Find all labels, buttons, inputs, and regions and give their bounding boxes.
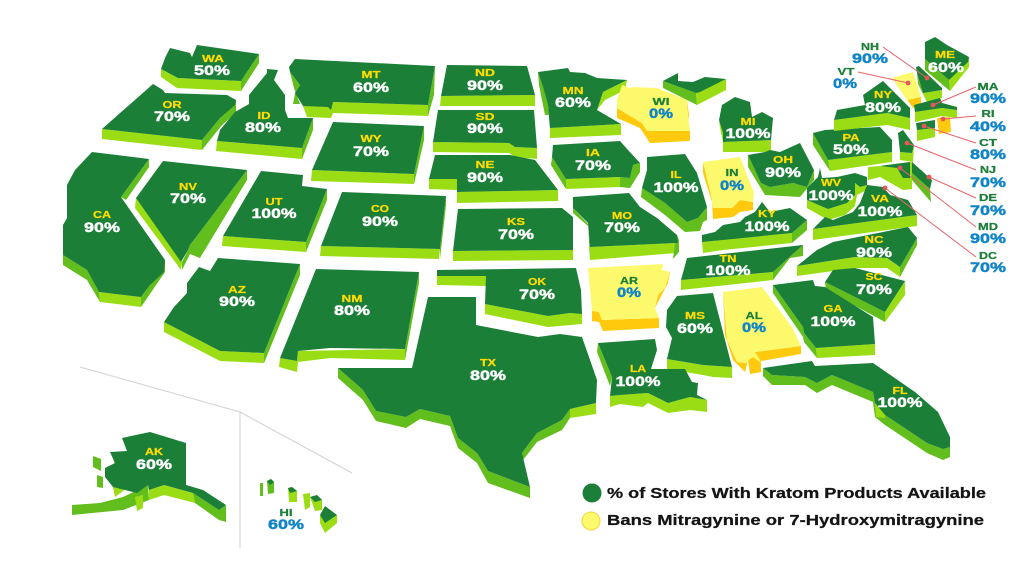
state: Florida (763, 361, 950, 460)
state: Virginia (813, 185, 917, 240)
state: Missouri: 70% (604, 219, 641, 235)
state: Hawaii: HI (280, 507, 293, 519)
state: Texas (338, 297, 597, 498)
state: Indiana: 0% (720, 177, 745, 193)
state: Arkansas: AR (620, 275, 638, 287)
callout: MD: 90% (970, 230, 1007, 246)
state: North Carolina (797, 227, 917, 277)
callout: CT: CT (979, 137, 998, 149)
state: Tennessee: TN (720, 253, 736, 265)
state: Arizona: 90% (219, 293, 256, 309)
state: Colorado: CO (371, 203, 389, 215)
state: Nevada: NV (179, 181, 197, 193)
callout: NH: NH (861, 41, 879, 53)
state: Tennessee: 100% (706, 262, 751, 278)
state: Oregon: OR (162, 99, 182, 111)
state: Michigan: 100% (726, 125, 771, 141)
state: South Carolina (825, 268, 905, 322)
state: Nevada (135, 161, 247, 270)
state: Louisiana: 100% (616, 373, 661, 389)
state: Kansas (453, 208, 573, 261)
callout: NH: 90% (852, 50, 889, 66)
state: South Dakota: SD (476, 111, 495, 123)
callout: DC: 70% (970, 259, 1007, 275)
state: Ohio: 90% (765, 164, 802, 180)
state: Vermont (892, 72, 921, 108)
state: Wyoming (311, 122, 424, 184)
state: Indiana (703, 157, 754, 219)
state: Utah: 100% (252, 205, 297, 221)
state: Nebraska (429, 155, 558, 203)
state: Virginia: VA (871, 193, 890, 205)
callout: RI (941, 108, 1007, 134)
state: Illinois (641, 154, 707, 232)
callout: MA: MA (978, 81, 999, 93)
state: West Virginia: 100% (808, 187, 854, 203)
state: New Mexico (279, 269, 419, 372)
state: Oklahoma (437, 268, 582, 327)
map of contiguous states (63, 37, 969, 498)
state: Utah (222, 171, 327, 252)
callout: NJ (905, 141, 1007, 190)
state: Colorado (320, 192, 446, 259)
state: Montana: MT (362, 69, 381, 81)
state: Minnesota: 60% (555, 94, 592, 110)
callout: DE: DE (979, 192, 997, 204)
state: Iowa: IA (586, 147, 601, 159)
state: Missouri: MO (612, 210, 632, 222)
state: Wisconsin: WI (652, 96, 670, 108)
state: South Dakota: 90% (467, 120, 504, 136)
state: Oregon: 70% (154, 108, 191, 124)
state: South Carolina: SC (866, 271, 883, 283)
callout: DE (927, 175, 1007, 218)
state: Idaho: 80% (245, 119, 282, 135)
state: Rhode Island (937, 117, 951, 134)
callout: DE: 70% (970, 202, 1007, 218)
state: Kentucky (702, 202, 807, 253)
state: Texas: TX (480, 357, 496, 369)
state: Ohio: OH (773, 154, 793, 166)
callout: DC (883, 186, 1007, 275)
state: Minnesota (538, 68, 627, 138)
callout: RI: RI (982, 108, 995, 120)
callout: CT (922, 124, 1007, 162)
state: Iowa (551, 141, 640, 189)
state: Mississippi: MS (685, 310, 705, 322)
state: Ohio (748, 143, 814, 197)
state: Montana: 60% (353, 79, 390, 95)
state: New York: 80% (865, 99, 902, 115)
state: Kentucky: KY (758, 208, 776, 220)
state: Nebraska: NE (476, 159, 494, 171)
state: New Jersey (898, 130, 914, 162)
state: Alaska: AK (145, 446, 163, 458)
state: Hawaii (260, 479, 337, 533)
state: Arizona: AZ (228, 284, 247, 296)
legend entry: stores with kratom (582, 484, 986, 502)
state: Georgia: GA (824, 303, 843, 315)
state: Indiana: IN (726, 167, 738, 179)
legend entry: bans: Bans Mitragynine or 7-Hydroxymitragynine (607, 513, 984, 529)
state: Delaware (912, 162, 932, 202)
state: Illinois: IL (670, 169, 682, 181)
state: Virginia: 100% (858, 203, 903, 219)
callout: MA (931, 81, 1007, 107)
state: California: 90% (84, 219, 121, 235)
state: New York: NY (874, 89, 892, 101)
state: Kentucky: 100% (744, 218, 790, 234)
state: Pennsylvania (813, 127, 892, 171)
state: North Dakota: ND (475, 67, 496, 79)
state: New Hampshire (916, 66, 942, 102)
state: Kansas: 70% (498, 226, 535, 242)
state: Mississippi: 60% (677, 320, 714, 336)
state: Louisiana (597, 339, 707, 413)
state: New Mexico: NM (342, 293, 363, 305)
callout: NJ: NJ (980, 164, 996, 176)
state: Kansas: KS (507, 216, 525, 228)
callout: VT (833, 66, 910, 91)
state: North Dakota: 90% (467, 77, 504, 93)
state: Maine (925, 37, 969, 91)
state: West Virginia (807, 168, 867, 220)
callout: NJ: 70% (970, 174, 1007, 190)
state: Arizona (164, 258, 300, 363)
callout: MD: MD (978, 221, 998, 233)
state: Michigan upper peninsula (663, 73, 726, 105)
state: Idaho (216, 69, 313, 159)
state: Michigan: MI (740, 116, 756, 128)
state: California (63, 152, 165, 307)
state: Washington (161, 45, 259, 91)
state: Texas: 80% (470, 367, 507, 383)
state: West Virginia: WV (821, 177, 841, 189)
state: Tennessee (681, 245, 803, 290)
state: Louisiana: LA (630, 363, 646, 375)
state: Washington: 50% (194, 62, 231, 78)
state: Maine: ME (935, 49, 955, 61)
callout: DC: DC (979, 250, 997, 262)
state: Alaska: 60% (136, 456, 173, 472)
callout: RI: 40% (970, 118, 1007, 134)
legend (582, 484, 986, 530)
callout: VT: VT (838, 66, 855, 78)
state: South Carolina: 70% (856, 281, 893, 297)
callout: MA: 90% (970, 90, 1007, 106)
state: New Mexico: 80% (334, 302, 371, 318)
callout: NH (852, 41, 929, 80)
state: Alabama: 0% (742, 319, 767, 335)
state: Maine: 60% (928, 59, 965, 75)
state: Colorado: 90% (362, 213, 399, 229)
callout: CT: 80% (970, 146, 1007, 162)
callout: MD (898, 166, 1007, 246)
state: Alabama (723, 287, 801, 374)
state: Minnesota: MN (562, 85, 584, 97)
state: Illinois: 100% (654, 179, 699, 195)
state: Arkansas (588, 264, 670, 331)
state: Montana (289, 59, 435, 118)
state: Wyoming: 70% (353, 143, 390, 159)
state: Oregon (102, 84, 236, 150)
state: New York (834, 81, 910, 131)
state: Alaska (72, 432, 226, 522)
state: Wisconsin: 0% (649, 105, 674, 121)
state: Utah: UT (266, 196, 283, 208)
state: Washington: WA (202, 53, 225, 65)
state: Florida: 100% (878, 394, 923, 410)
legend entry: bans (582, 512, 984, 530)
callout: VT: 0% (833, 75, 858, 91)
state: Nebraska: 90% (467, 169, 504, 185)
state: Georgia (773, 280, 875, 358)
state: Mississippi (666, 293, 732, 378)
state: North Carolina: 90% (856, 244, 893, 260)
state: Georgia: 100% (810, 313, 856, 329)
state: Massachusetts (914, 98, 957, 122)
state: Nevada: 70% (170, 190, 207, 206)
state: Oklahoma: 70% (519, 286, 556, 302)
state: Alabama: AL (746, 310, 763, 322)
legend entry: stores with kratom: % of Stores With Kratom Products Available (607, 486, 986, 502)
state: Michigan (719, 97, 773, 152)
state: Missouri (573, 193, 679, 260)
state: North Carolina: NC (864, 234, 884, 246)
state: Iowa: 70% (575, 157, 612, 173)
state: Hawaii: 60% (268, 516, 305, 532)
state: California: CA (93, 209, 111, 221)
state: Pennsylvania: PA (842, 132, 860, 144)
state: Connecticut (916, 120, 935, 141)
state: Idaho: ID (258, 110, 271, 122)
state: Wisconsin (617, 85, 690, 143)
state: South Dakota (433, 110, 537, 159)
state: Maryland (868, 162, 912, 190)
state: North Dakota (440, 65, 535, 106)
state: Arkansas: 0% (617, 284, 642, 300)
state: Oklahoma: OK (528, 276, 546, 288)
state: Wyoming: WY (360, 133, 382, 145)
state: Florida: FL (892, 385, 908, 397)
state: Pennsylvania: 50% (833, 141, 870, 157)
